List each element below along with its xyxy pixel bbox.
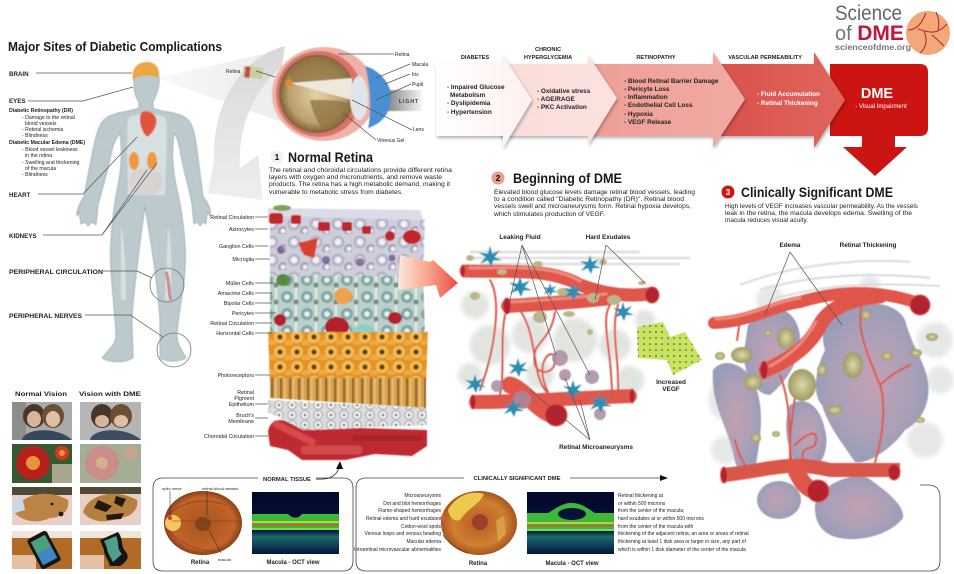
complication labels	[9, 71, 191, 367]
macula spot	[286, 80, 292, 86]
retina layer labels: Retinal Circulation	[210, 321, 254, 327]
paragraph: layers with oxygen and micronutrients, and remove waste	[269, 175, 443, 181]
ganglion cell layer	[270, 216, 425, 278]
sclera	[272, 47, 376, 141]
retinopathy items: - VEGF Release	[624, 119, 672, 126]
eye labels: Lens	[413, 127, 424, 133]
retina layer labels: Microglia	[232, 257, 254, 263]
photo: phone normal	[12, 530, 72, 570]
header diabetes: DIABETES	[461, 55, 489, 61]
choroidal circulation	[268, 420, 427, 460]
edema blob bottom left	[757, 481, 801, 519]
eye labels	[226, 52, 428, 144]
section 1: normal retina heading	[269, 149, 453, 196]
nerve fibre layer	[268, 208, 424, 226]
diabetic macular edema list: Diabetic Macular Edema (DME)	[9, 140, 85, 146]
vision header normal: Normal Vision	[15, 391, 67, 398]
bottom panels	[153, 461, 940, 571]
abdominal organs	[129, 168, 163, 196]
paragraph: which stimulates production of VEGF.	[493, 212, 605, 218]
header retinopathy: RETINOPATHY	[636, 55, 676, 61]
vessel highlight	[470, 268, 606, 302]
section 2 labels: VEGF	[662, 386, 680, 393]
paragraph: leak in the retina, the macula develops edema. Swelling of the	[725, 211, 913, 217]
permeability items: - Fluid Accumulation	[757, 91, 820, 98]
light cone inside eye	[290, 78, 352, 100]
torso and leg highlights	[121, 114, 171, 300]
ghost cell background	[458, 291, 655, 394]
eyes label	[9, 87, 133, 105]
findings list: Cotton-wool spots	[401, 524, 441, 530]
section 2 labels: Hard Exudates	[586, 234, 631, 241]
findings list: Dot and blot hemorrhages	[383, 501, 442, 507]
hyperglycemia items	[537, 88, 591, 111]
edema blob mid	[786, 401, 827, 469]
retinopathy items: - Endothelial Cell Loss	[624, 102, 693, 109]
logo retina icon	[906, 11, 950, 55]
hard exudates	[466, 255, 646, 335]
DME end box	[830, 64, 928, 176]
diabetic retinopathy list: blood vessels	[25, 121, 57, 127]
eye labels: Retina	[226, 69, 241, 75]
heading: Normal Retina	[288, 149, 373, 165]
photo: dog dme	[80, 487, 141, 525]
retinopathy items	[624, 78, 719, 126]
retina layer labels: Horizontal Cells	[216, 331, 254, 337]
CSME definition: hard exudates at or within 500 microns	[618, 516, 704, 522]
CSME definition: thickening of the adjacent retina; an area or areas of retinal	[618, 531, 749, 537]
paragraph: products. The retina has a high metabolic demand, making it	[269, 182, 450, 188]
arrow diabetes	[436, 55, 532, 148]
CSME definition: thickening at least 1 disk area or larger in size, any part of	[618, 539, 746, 545]
bipolar and amacrine layer	[270, 276, 425, 334]
hyperglycemia items: - AGE/RAGE	[537, 96, 575, 103]
eye labels: Macula	[412, 62, 428, 68]
diabetic retinopathy list: - Retinal ischemia	[22, 127, 63, 133]
edema blob left	[713, 363, 761, 474]
iris and cornea	[365, 66, 391, 128]
section 2 labels	[499, 234, 686, 451]
logo word science: Science	[835, 2, 902, 25]
section 2 labels: Retinal Microaneurysms	[559, 444, 633, 451]
retinopathy items: - Inflammation	[624, 94, 668, 101]
CSME definition: from the center of the macula with	[618, 524, 694, 530]
retina layer labels: Photoreceptors	[217, 373, 254, 379]
lens	[350, 76, 368, 120]
retina layer labels: Müller Cells	[226, 281, 254, 287]
kidneys	[129, 152, 157, 170]
circulation ring	[150, 268, 184, 302]
heading: Clinically Significant DME	[741, 185, 893, 200]
orange amacrine cell	[334, 288, 352, 304]
diabetes items: - Dyslipidemia	[447, 100, 491, 107]
number badge 3: 3	[726, 188, 731, 197]
diabetic retinopathy list: - Blindness	[22, 133, 48, 139]
diabetic macular edema list: of the macula	[25, 166, 56, 172]
branch vessel	[795, 468, 815, 491]
flow arrows	[436, 47, 928, 176]
section 2: beginning of DME heading	[492, 171, 695, 218]
normal OCT	[252, 492, 339, 554]
retina layer labels: Amacrine Cells	[218, 291, 254, 297]
diabetic retinopathy list: - Damage to the retinal	[22, 115, 75, 121]
diabetic retinopathy list	[9, 108, 75, 139]
hyperglycemia items: - Oxidative stress	[537, 88, 591, 95]
eye labels: Vitreous Gel	[377, 138, 404, 144]
arrow vascular permeability	[720, 52, 845, 148]
eyes label: EYES	[9, 98, 26, 105]
diabetic macular edema list: in the retina	[25, 153, 52, 159]
photo: phone dme	[80, 531, 141, 569]
photo: dog normal	[12, 487, 72, 525]
pink arrow normal to DME	[398, 255, 458, 298]
heart	[140, 111, 156, 137]
section 3 labels: Edema	[780, 242, 801, 249]
second vessel	[508, 298, 610, 306]
findings list	[354, 493, 442, 553]
caption retina: Retina	[469, 561, 488, 567]
retinopathy items: - Blood Retinal Barrier Damage	[624, 78, 719, 85]
second vessel	[766, 296, 880, 370]
CSME definition: from the center of the macula;	[618, 508, 684, 514]
top vessel	[466, 271, 650, 295]
small vessels	[480, 280, 618, 395]
human body figure	[77, 62, 211, 362]
microaneurysms	[491, 350, 606, 420]
peripheral circulation label	[9, 269, 152, 278]
small vessels	[735, 305, 910, 470]
paragraph: vulnerable to metabolic stress from diabetes.	[269, 190, 403, 196]
permeability items	[757, 91, 820, 107]
light beam	[388, 90, 422, 111]
diabetes items	[447, 84, 505, 116]
curved grey arrow from eye to retina	[208, 46, 285, 200]
photo: girls dme	[80, 402, 141, 440]
fibres	[740, 261, 940, 300]
retina rim	[276, 51, 362, 137]
edema blob right	[816, 304, 928, 462]
paragraph: macula reduces visual acuity.	[725, 218, 808, 224]
fundus annotations: optic nerve	[162, 486, 182, 491]
exudates	[715, 310, 938, 443]
paragraph	[725, 204, 918, 224]
findings list: Venous loops and venous beading	[365, 531, 441, 537]
section 3 labels	[765, 242, 896, 325]
photo: flower normal	[12, 444, 72, 483]
logo word of DME: of DME	[835, 22, 904, 45]
number badge 2	[492, 172, 504, 184]
photoreceptor rods	[270, 378, 426, 408]
CSME definition: Retinal thickening at	[618, 493, 664, 499]
vessel ends	[460, 265, 659, 426]
eye labels: LIGHT	[399, 99, 419, 105]
eye labels: Iris	[412, 72, 419, 78]
fundus annotations	[162, 486, 238, 562]
astrocyte green tuft	[273, 205, 291, 211]
eye labels: Pupil	[412, 82, 423, 88]
number badge 1: 1	[275, 153, 280, 162]
retina layer labels: Epithelium	[229, 402, 255, 408]
findings list: Microaneurysms	[404, 493, 441, 499]
panel title: CLINICALLY SIGNIFICANT DME	[474, 476, 561, 482]
header chronic hyperglycemia: CHRONIC	[535, 47, 561, 53]
peripheral nerves label	[9, 313, 163, 337]
arrow chronic hyperglycemia	[500, 55, 617, 145]
panel normal tissue	[153, 461, 353, 571]
section 3: clinically significant DME heading	[722, 185, 918, 224]
retina layer labels: Choroidal Circulation	[204, 434, 254, 440]
header chronic hyperglycemia: HYPERGLYCEMIA	[524, 55, 572, 61]
findings list: Retinal edema and hard exudates	[366, 516, 441, 522]
lower vessel	[476, 396, 630, 402]
findings list: Macular edema	[407, 539, 441, 545]
ghost cell background	[708, 275, 954, 464]
photo: flower dme	[80, 444, 141, 483]
retina layer stack	[268, 205, 428, 460]
arrowhead	[336, 461, 343, 469]
retina layer labels: Astrocytes	[229, 227, 254, 233]
caption OCT: Macula - OCT view	[266, 560, 320, 566]
retina layer labels: Retinal	[237, 390, 254, 396]
retina layer labels: Pigment	[234, 396, 254, 402]
vessel highlights	[716, 298, 816, 366]
fibres	[470, 252, 690, 264]
leg circulation detail	[166, 272, 171, 300]
section 2 labels: Increased	[656, 379, 686, 386]
teal horizontal cell	[350, 324, 378, 334]
retina layer labels: Bipolar Cells	[224, 301, 254, 307]
DME retina fundus	[440, 491, 517, 555]
kidneys label	[9, 163, 157, 240]
top vessel	[714, 293, 918, 323]
normal retina fundus	[164, 491, 242, 555]
arrow retinopathy	[590, 52, 745, 148]
peripheral nerves label: PERIPHERAL NERVES	[9, 313, 82, 320]
logo url: scienceofdme.org	[835, 43, 911, 52]
eye labels: Retina	[395, 52, 410, 58]
body silhouette	[77, 63, 211, 362]
retina layer labels: Ganglion Cells	[219, 244, 254, 250]
diabetic macular edema list	[9, 140, 85, 178]
arrow up from panel	[316, 468, 339, 479]
retina layer labels: Bruch's	[236, 413, 254, 419]
retina layer labels: Retinal Circulation	[210, 215, 254, 221]
retina layer labels	[204, 215, 276, 440]
brain label	[9, 71, 132, 78]
permeability items: - Retinal Thickening	[757, 100, 818, 107]
decorative cone from head to eye	[157, 50, 282, 122]
diabetic retinopathy list: Diabetic Retinopathy (DR)	[9, 108, 73, 114]
diabetic macular edema list: - Blindness	[22, 172, 48, 178]
caption retina: Retina	[191, 560, 210, 566]
diabetes items: - Hypertension	[447, 109, 492, 116]
hyperglycemia items: - PKC Activation	[537, 104, 587, 111]
header vascular permeability: VASCULAR PERMEABILITY	[728, 55, 802, 61]
brain label: BRAIN	[9, 71, 29, 78]
photo: girls normal	[12, 402, 72, 440]
eye cross-section	[243, 47, 422, 141]
retina layer labels: Pericytes	[232, 311, 254, 317]
findings list: Intraretinal microvascular abnormalities	[354, 547, 441, 553]
DME OCT	[527, 492, 614, 554]
paragraph: to a condition called "Diabetic Retinopathy (DR)". Retinal blood	[494, 197, 684, 203]
retina inset	[243, 66, 263, 79]
diabetic macular edema list: - Swelling and thickening	[22, 160, 79, 166]
increased VEGF arrow	[637, 322, 702, 375]
CSME definition	[618, 493, 749, 553]
vitreous interior	[279, 55, 355, 133]
arrowhead right	[660, 475, 668, 481]
CSME definition: which is within 1 disk diameter of the center of the macula	[618, 547, 746, 553]
green muller cell	[276, 274, 290, 286]
heart label: HEART	[9, 192, 31, 199]
paragraph: vessels swell and microaneurysms form. Retinal hypoxia develops,	[494, 204, 691, 210]
vision header dme: Vision with DME	[79, 391, 142, 398]
peripheral circulation label: PERIPHERAL CIRCULATION	[9, 269, 104, 276]
number badge 1	[270, 150, 284, 164]
retinopathy items: - Hypoxia	[624, 111, 653, 118]
paragraph: High levels of VEGF increases vascular permeability. As the vessels	[725, 204, 918, 210]
diabetes items: - Impaired Glucose	[447, 84, 505, 91]
bruchs and pigment epithelium	[268, 400, 427, 430]
paragraph: The retinal and choroidal circulations provide different retina	[269, 168, 453, 174]
paragraph	[269, 168, 453, 196]
logo	[835, 2, 950, 55]
paragraph	[493, 190, 695, 218]
purple microglia	[277, 246, 396, 266]
edema blob bottom right	[815, 477, 903, 539]
kidneys label: KIDNEYS	[9, 233, 37, 240]
red vessels lower	[274, 312, 402, 337]
red vessels upper	[269, 213, 421, 258]
section 3 illustration	[708, 261, 954, 539]
retinopathy items: - Pericyte Loss	[624, 86, 670, 93]
panel clinically significant DME	[354, 475, 940, 571]
DME title: DME	[861, 86, 893, 102]
blue microglia stars	[465, 246, 634, 417]
findings list: Flame-shaped hemorrhages	[378, 508, 441, 514]
fundus annotations: retinal blood vessels	[202, 486, 238, 491]
DME sub text: - Visual Impairment	[855, 104, 907, 110]
vision comparison	[12, 391, 142, 570]
retina layer labels: Membrane	[228, 419, 254, 425]
branch vessel	[510, 385, 552, 415]
diabetes items: Metabolism	[450, 92, 485, 99]
heart label	[9, 137, 137, 199]
title: Major Sites of Diabetic Complications	[8, 40, 222, 54]
edema blob left top	[744, 309, 800, 395]
diabetic macular edema list: - Blood vessel leakiness	[22, 147, 78, 153]
section 2 labels: Leaking Fluid	[499, 234, 541, 241]
vessel ends	[720, 295, 930, 502]
heading: Beginning of DME	[513, 171, 622, 186]
section 2 illustration	[458, 246, 690, 426]
CSME definition: or within 500 microns	[618, 501, 666, 507]
dark fundus patches	[290, 57, 352, 128]
panel title: NORMAL TISSUE	[263, 477, 311, 483]
nerve ring	[157, 333, 191, 367]
photoreceptor nuclei layer	[268, 332, 428, 385]
number badge 2: 2	[496, 174, 501, 183]
lower vessel	[724, 466, 900, 475]
paragraph: Elevated blood glucose levels damage retinal blood vessels, leading	[494, 190, 695, 196]
caption OCT: Macula - OCT view	[545, 561, 599, 567]
number badge 3	[722, 186, 734, 198]
brain	[133, 62, 159, 80]
section 3 labels: Retinal Thickening	[840, 242, 896, 249]
fundus annotations: macula	[218, 557, 232, 562]
